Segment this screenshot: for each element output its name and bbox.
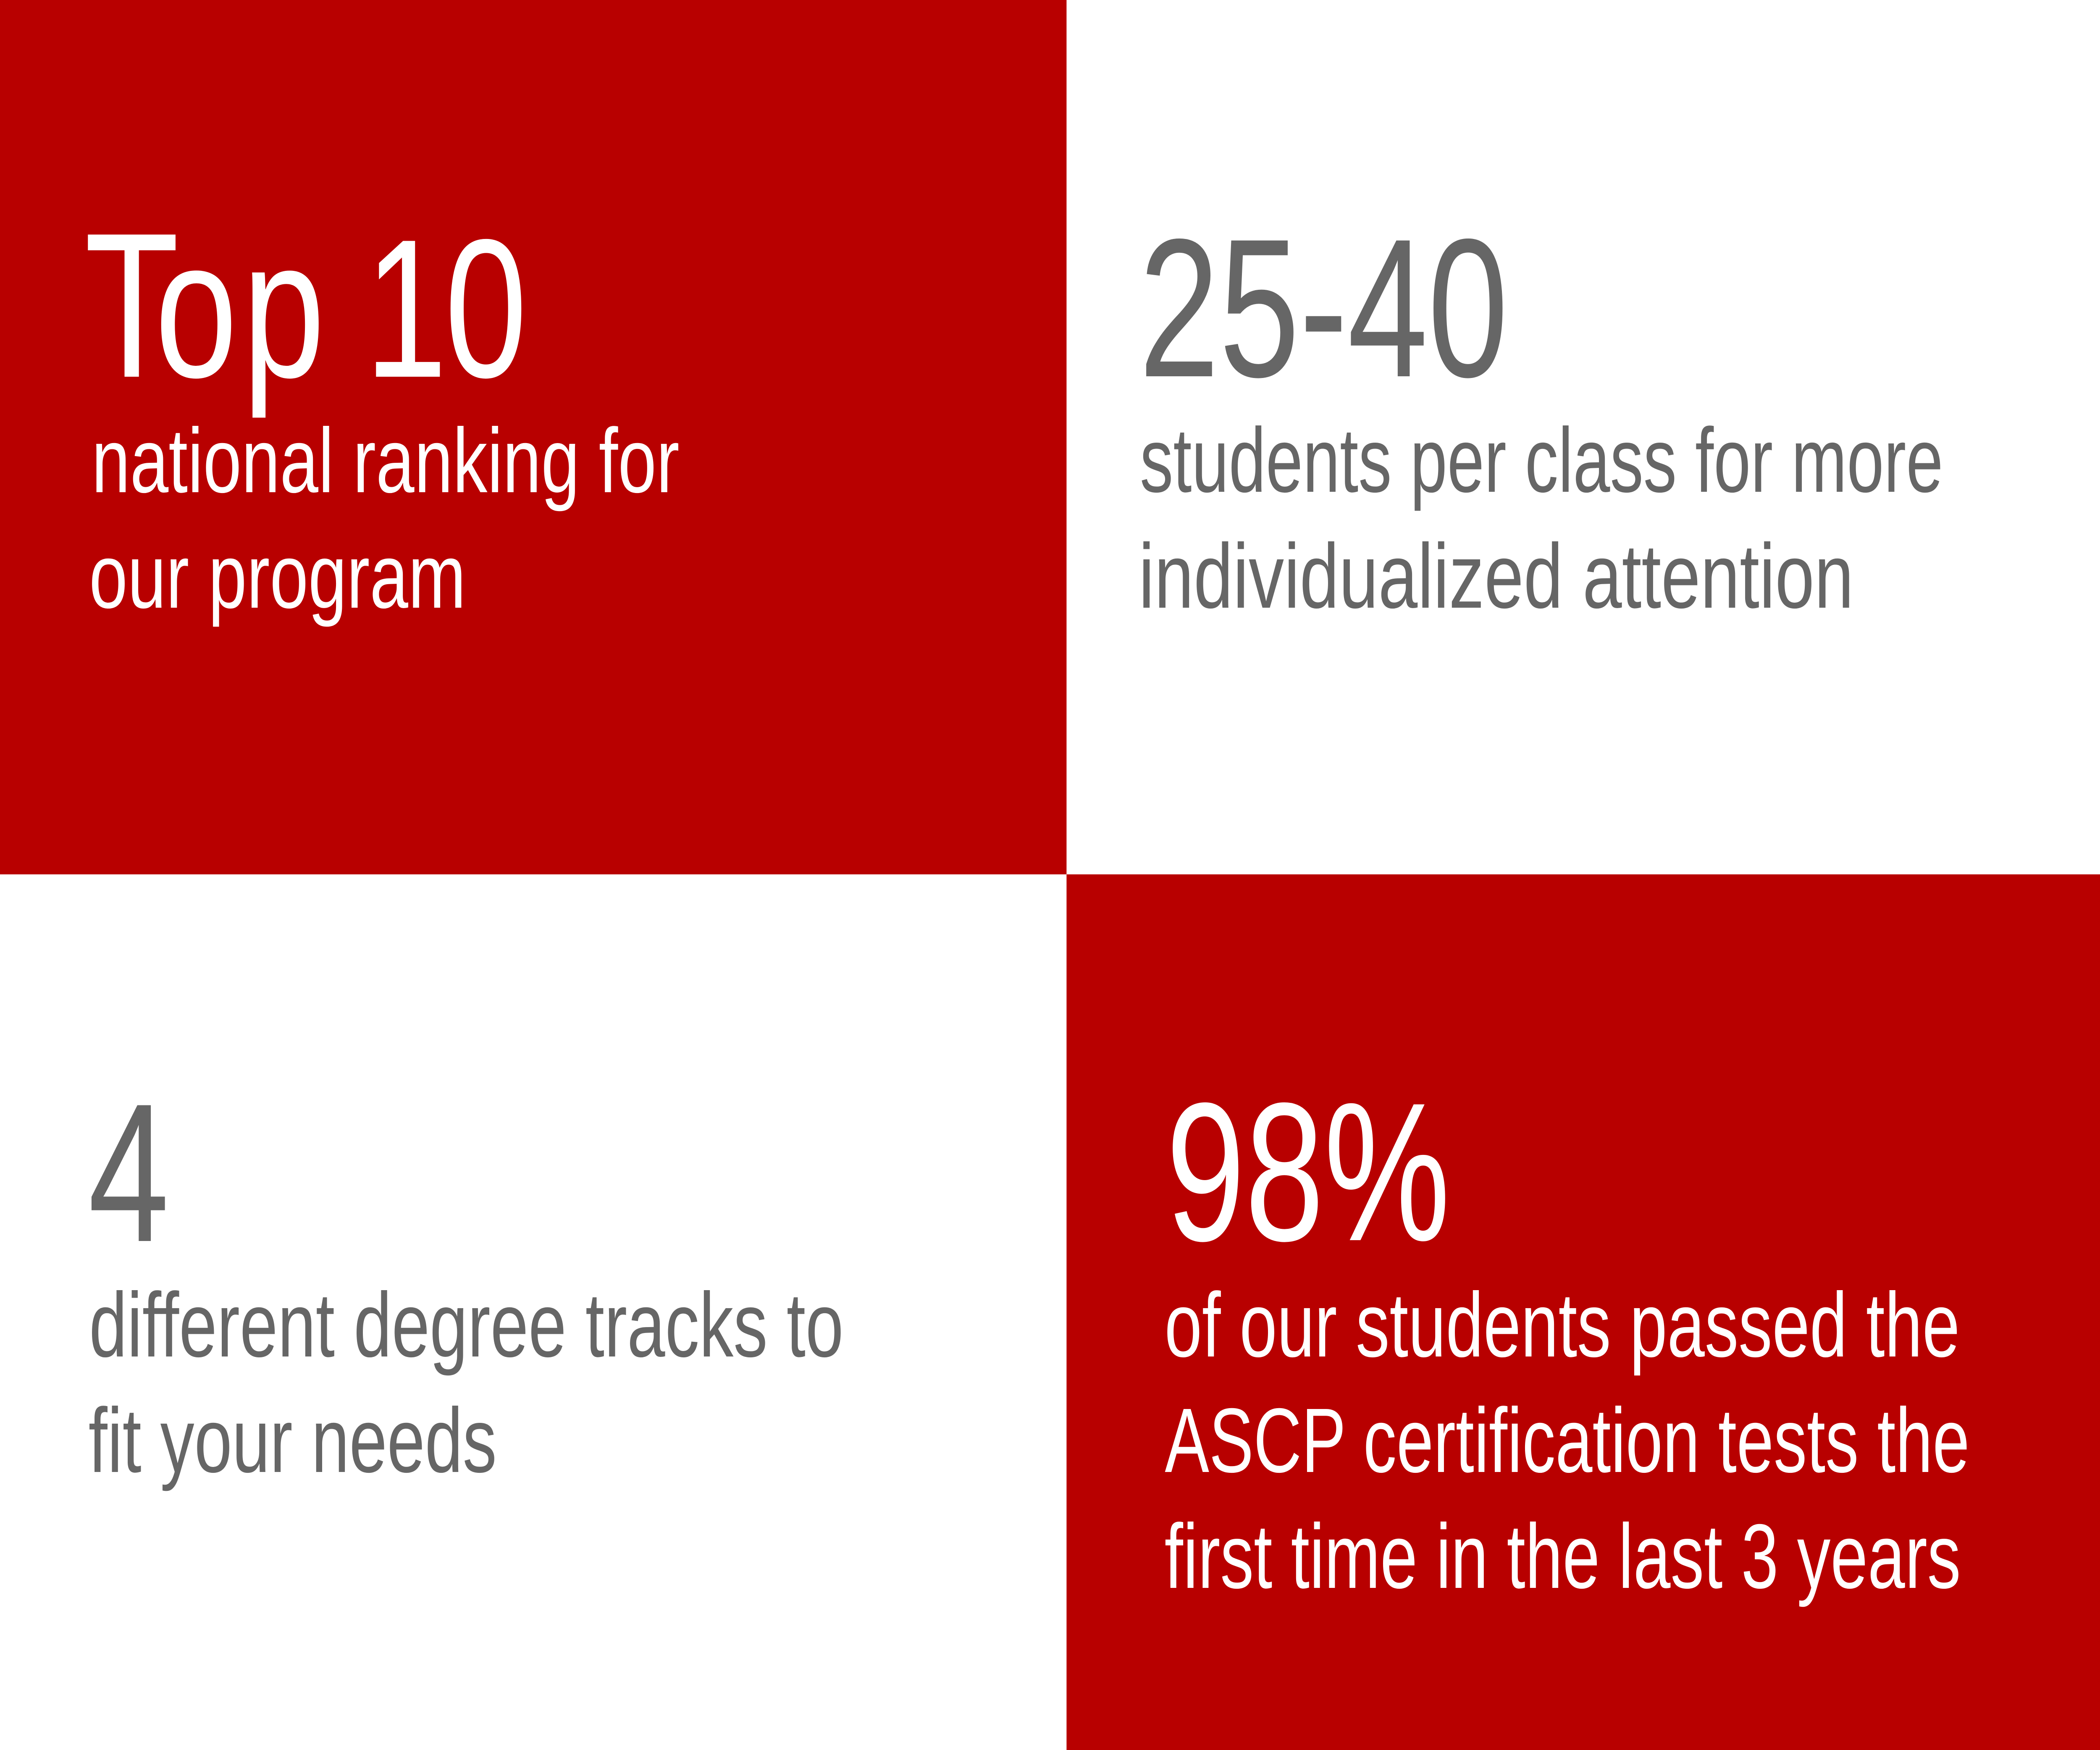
heading: 4: 4 bbox=[88, 1063, 169, 1283]
text: national ranking description bbox=[89, 409, 680, 627]
text: certification description: first time in the last 3 years bbox=[1165, 1505, 1961, 1607]
text: degree tracks description: different degree tracks to bbox=[89, 1274, 843, 1376]
text: national ranking description: our program bbox=[89, 525, 466, 627]
text: degree tracks description: fit your needs bbox=[89, 1389, 497, 1491]
text: class size description bbox=[1139, 409, 1943, 627]
panel: certification pass rate bbox=[1066, 874, 2100, 1750]
panel: national ranking bbox=[0, 0, 1066, 874]
panel: degree tracks bbox=[88, 1063, 843, 1491]
text: certification description bbox=[1165, 1274, 1970, 1607]
heading: 98%: 98% bbox=[1166, 1062, 1450, 1283]
heading: 25-40: 25-40 bbox=[1139, 198, 1508, 419]
text: national ranking description: national ranking for bbox=[92, 409, 680, 512]
panel: class size bbox=[1139, 198, 1943, 627]
text: certification description: of our students passed the bbox=[1165, 1274, 1960, 1376]
text: class size description: individualized attention bbox=[1139, 525, 1854, 627]
text: certification description: ASCP certification tests the bbox=[1165, 1389, 1970, 1491]
text: degree tracks description bbox=[89, 1274, 843, 1491]
heading: Top 10: Top 10 bbox=[84, 190, 527, 421]
text: class size description: students per class for more bbox=[1140, 409, 1943, 511]
